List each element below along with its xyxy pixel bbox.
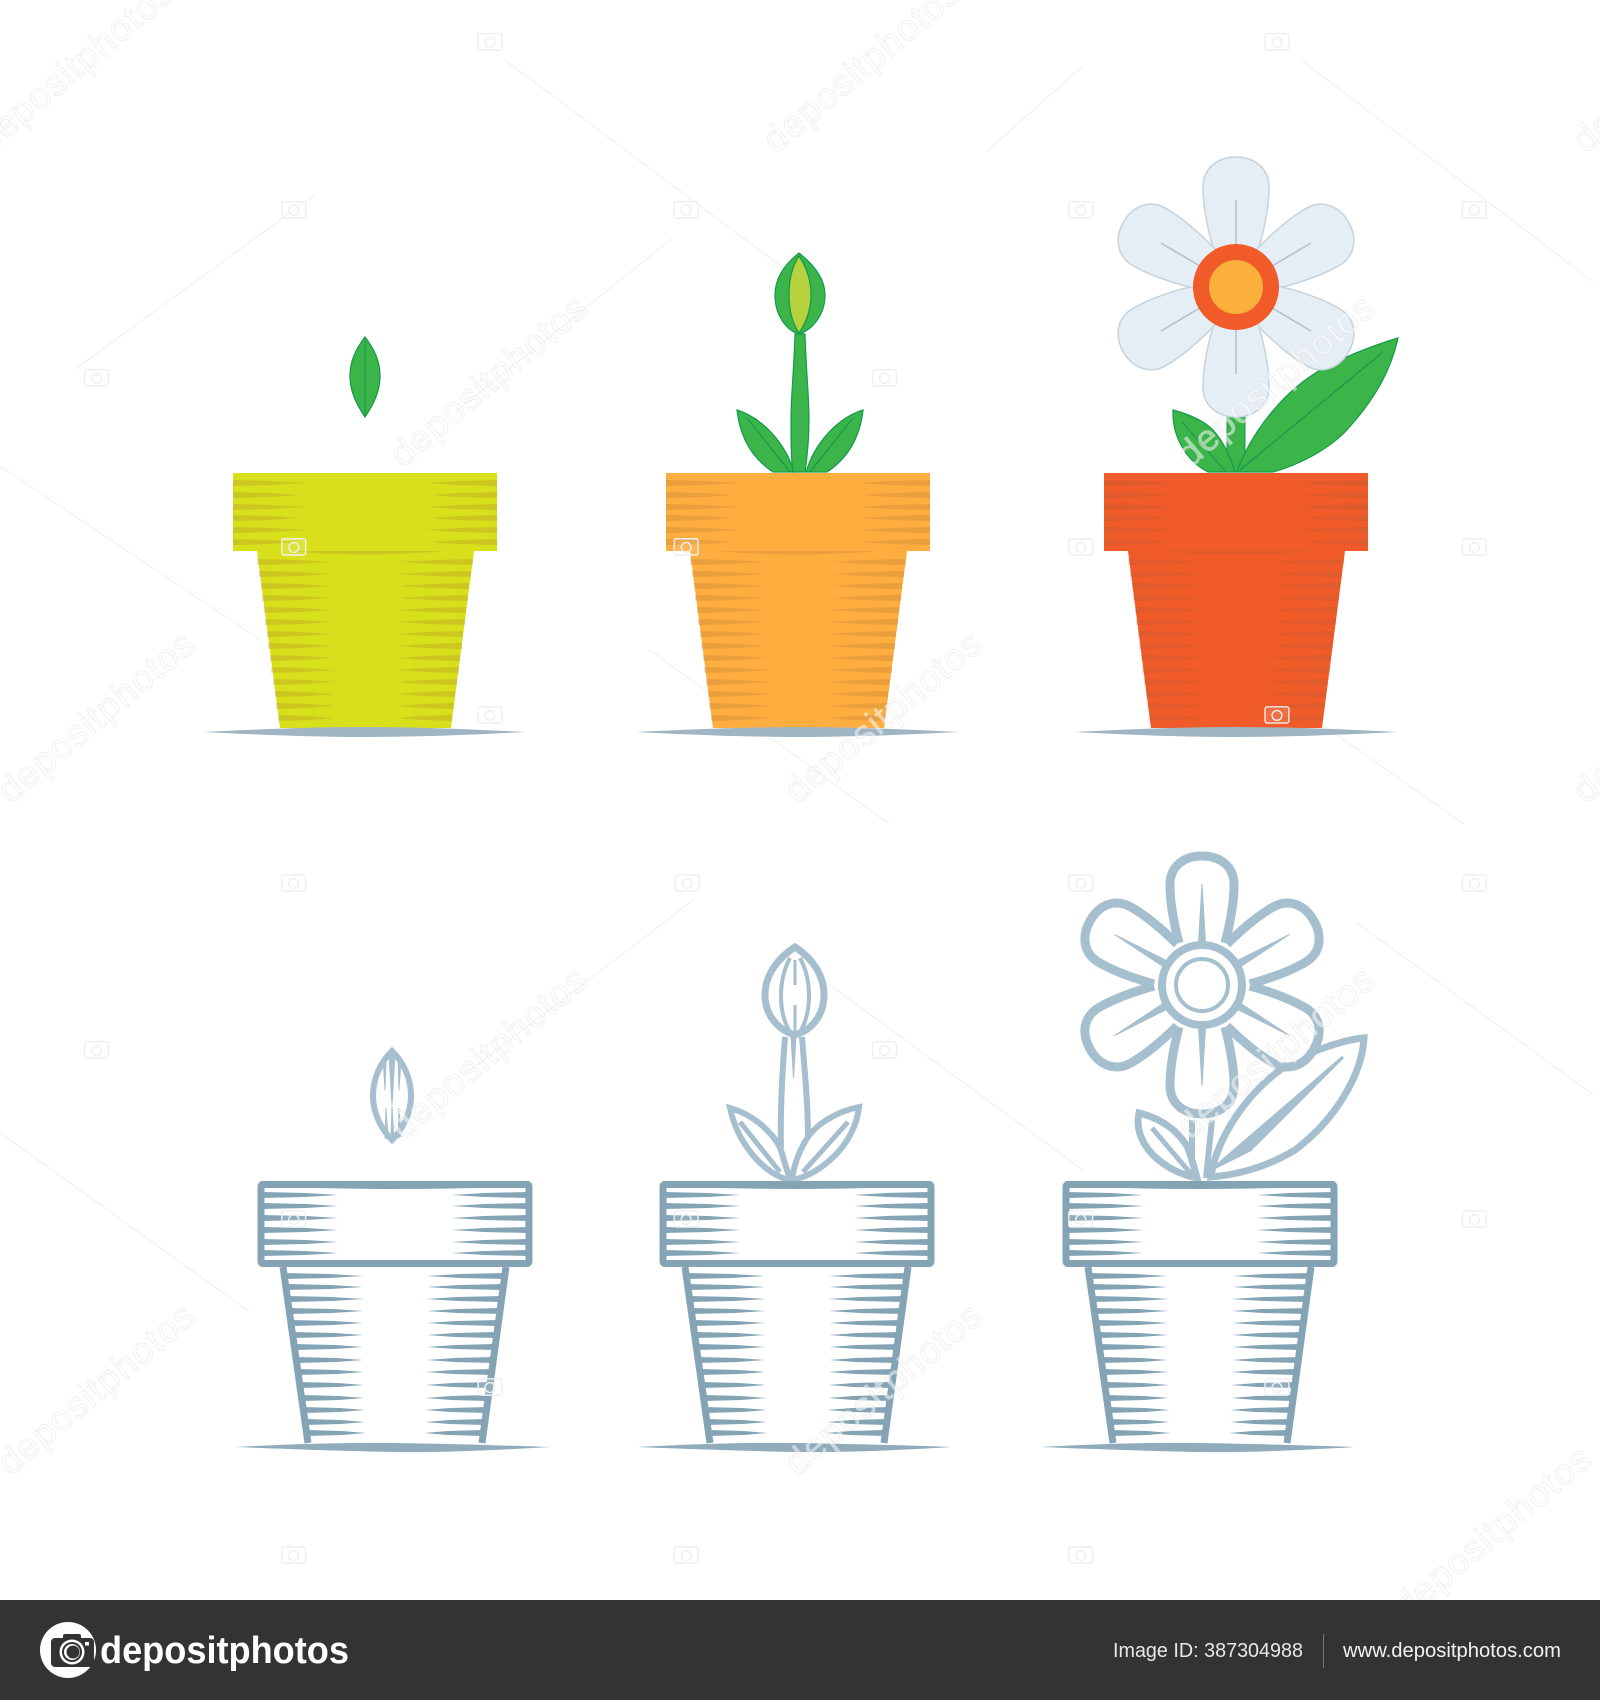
icon: camera logo (40, 1622, 96, 1678)
watermarks: depositphotos (1386, 1438, 1599, 1626)
watermarks: depositphotos (1169, 287, 1382, 475)
panel: outline bud stage (637, 947, 952, 1452)
watermark hairlines (0, 60, 1593, 1312)
watermarks: depositphotos (776, 623, 990, 811)
icon: green seed leaf (350, 337, 380, 417)
panel: seed stage, yellow pot (203, 337, 526, 737)
pot shadow (203, 727, 526, 737)
icon: outline seed (373, 1051, 411, 1140)
icon: outline budding plant (730, 947, 859, 1180)
icon: budding plant (737, 253, 863, 472)
pot shadow (1074, 727, 1397, 737)
website url: www.depositphotos.com (1342, 1639, 1561, 1662)
watermarks: depositphotos (382, 959, 595, 1147)
icon: outline flower pot (637, 1181, 952, 1452)
pot shadow (636, 727, 959, 737)
watermarks: depositphotos (1169, 959, 1382, 1147)
image id: Image ID: 387304988 (1113, 1639, 1303, 1662)
footer bar (0, 1600, 1600, 1700)
icon: yellow flower pot (233, 473, 497, 728)
panel: outline bloom stage (1040, 856, 1364, 1452)
panel: bloom stage, red pot (1074, 157, 1398, 737)
icon: outline flower pot (1040, 1181, 1355, 1452)
icon: outline flower pot (235, 1181, 550, 1452)
logo wordmark: depositphotos (100, 1630, 349, 1672)
icon: outline blooming flower (1074, 856, 1364, 1178)
icon: orange flower pot (666, 473, 930, 728)
divider (1323, 1634, 1324, 1668)
icon: red flower pot (1104, 473, 1368, 728)
panel: bud stage, orange pot (636, 253, 959, 737)
icon: blooming flower (1107, 157, 1398, 472)
panel: outline seed stage (235, 1051, 550, 1452)
watermarks: depositphotos (776, 1295, 990, 1483)
watermarks: depositphotos (382, 287, 595, 475)
